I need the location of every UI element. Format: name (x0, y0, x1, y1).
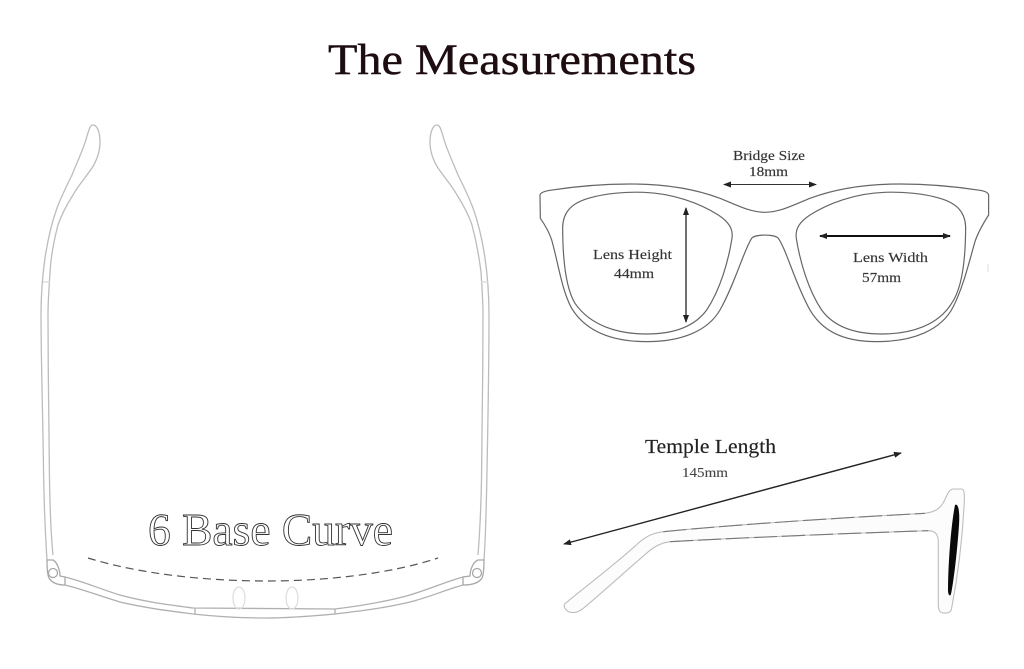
nose pads (233, 587, 298, 609)
front frame (65, 577, 463, 618)
bridge size value: 18mm (749, 165, 788, 180)
temple length value: 145mm (682, 466, 728, 481)
title: The Measurements (328, 37, 696, 84)
frame outline (540, 184, 989, 342)
left temple arm (41, 125, 100, 560)
small edge mark (987, 264, 989, 272)
temple arm darker edges (663, 513, 928, 542)
right temple arm (430, 125, 489, 560)
panel: front view of glasses (540, 149, 989, 342)
base curve label: 6 Base Curve (148, 505, 393, 555)
panel: top view of glasses with base curve (41, 125, 489, 618)
bridge size label: Bridge Size (733, 149, 805, 164)
lens width value: 57mm (862, 271, 901, 286)
hinges (47, 560, 484, 585)
dashed base curve (88, 558, 438, 581)
lens side view (948, 505, 959, 595)
temple length arrow (564, 453, 901, 544)
lens height label: Lens Height (593, 248, 672, 263)
lens height value: 44mm (614, 267, 654, 282)
lens width label: Lens Width (853, 251, 928, 266)
temple length label: Temple Length (645, 436, 776, 458)
panel: side view of temple (564, 436, 964, 613)
temple arm fill and light tail (564, 489, 964, 613)
lens width arrow (820, 235, 950, 237)
bridge arrow (724, 184, 816, 186)
lens height arrow (685, 208, 687, 322)
